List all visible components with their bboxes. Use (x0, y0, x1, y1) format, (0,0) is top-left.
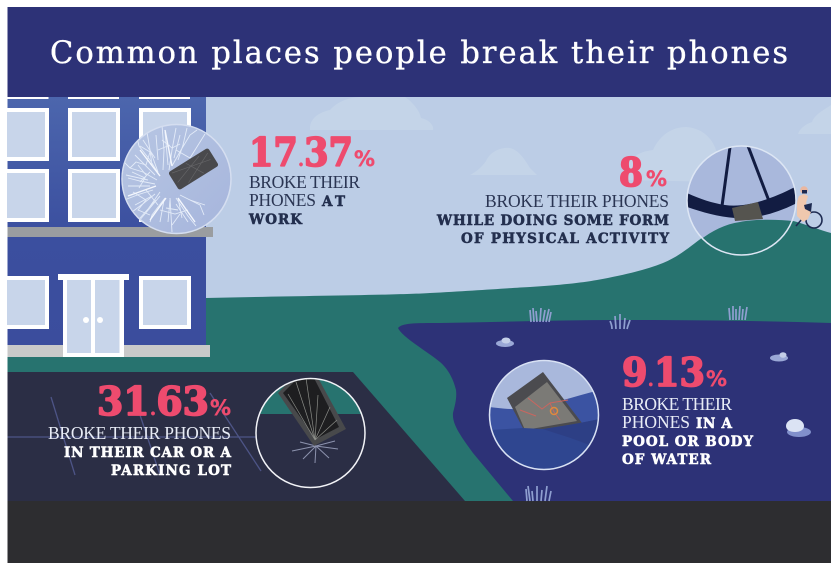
circle outline: water (490, 360, 598, 470)
stat: physical activity: % (646, 167, 667, 191)
stat: car or parking lot: % (210, 396, 231, 420)
rocks (496, 338, 811, 437)
stat: car or parking lot: IN THEIR CAR OR A (64, 445, 232, 461)
stat: at work: % (354, 147, 375, 171)
stat: pool or water: OF WATER (622, 452, 712, 468)
icon: cyclist (796, 186, 822, 228)
circle outline: work (122, 124, 231, 234)
title: Common places people break their phones (50, 36, 788, 71)
circle outline: activity (687, 146, 796, 255)
building (5, 97, 213, 357)
stat: at work: BROKE THEIR (249, 172, 360, 192)
stat: car or parking lot: 31.63 (97, 379, 209, 425)
stat: car or parking lot: PARKING LOT (111, 463, 231, 479)
stat: at work: 17.37 (249, 130, 353, 176)
stat: physical activity (436, 150, 669, 247)
stat: physical activity: WHILE DOING SOME FORM (436, 213, 669, 229)
parking lot (8, 372, 465, 501)
circle: wheel hitting phone (688, 146, 796, 252)
stat: physical activity: OF PHYSICAL ACTIVITY (461, 231, 669, 247)
stat: at work: WORK (248, 212, 303, 228)
stat: pool or water (622, 350, 753, 468)
circle outline: parking (256, 378, 365, 488)
water body (398, 320, 831, 501)
stat: car or parking lot: BROKE THEIR PHONES (48, 423, 231, 443)
bottom bar (8, 501, 831, 563)
circle: phone dropped on parking lot (260, 379, 361, 463)
parking lines (8, 393, 261, 475)
stat: at work: PHONES (249, 190, 316, 210)
stat: physical activity: 8 (619, 150, 643, 196)
clouds (310, 97, 831, 182)
stat: at work: AT (321, 194, 345, 210)
grass tufts (526, 306, 747, 501)
stat: pool or water: % (706, 367, 727, 391)
stat: physical activity: BROKE THEIR PHONES (485, 191, 669, 211)
stat: at work (248, 130, 375, 228)
icon: smashed phone (168, 148, 219, 190)
stat: pool or water: 9.13 (622, 350, 705, 396)
header bar (8, 7, 831, 97)
stat: pool or water: POOL OR BODY (622, 434, 753, 450)
circle: phone smashed on office floor (122, 125, 230, 233)
stat: pool or water: PHONES (622, 412, 690, 432)
stat: pool or water: BROKE THEIR (622, 394, 732, 414)
green hill (8, 219, 831, 502)
stat: pool or water: IN A (696, 416, 733, 432)
stat: car or parking lot (48, 379, 232, 479)
circle: phone sinking in water (489, 360, 600, 470)
